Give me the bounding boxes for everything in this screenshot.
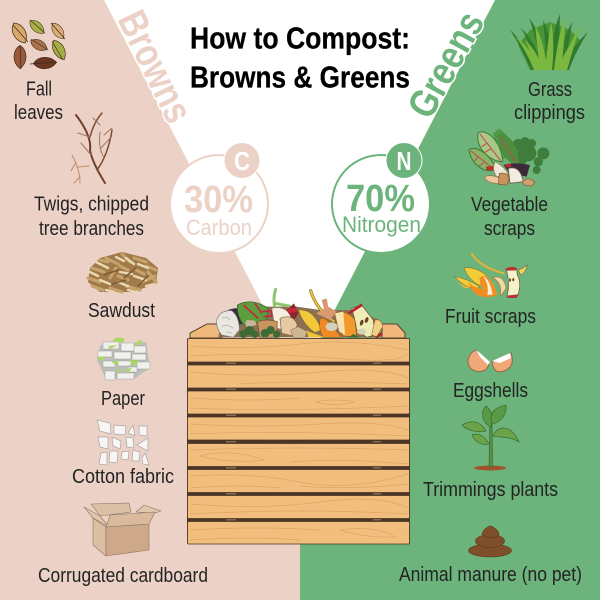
icon: fall leaves xyxy=(9,17,69,69)
label: fall leaves: Fall xyxy=(26,78,52,100)
label: corrugated cardboard: Corrugated cardboard xyxy=(38,565,208,587)
label: grass clippings: clippings xyxy=(514,102,585,124)
label: vegetable scraps xyxy=(471,194,548,240)
badge: 70% nitrogen: 70% xyxy=(346,178,415,220)
icon: cotton fabric xyxy=(97,420,149,465)
label: grass clippings xyxy=(514,79,585,124)
plank gap notches xyxy=(226,362,381,520)
illustration: compost bin xyxy=(187,289,410,544)
badge: 30% carbon: C xyxy=(234,146,250,176)
icon: sawdust xyxy=(88,252,158,292)
heading: Browns: Browns xyxy=(109,4,201,130)
panel: greens background xyxy=(300,0,600,600)
badge: 30% carbon: Carbon xyxy=(186,215,252,240)
label: fruit scraps: Fruit scraps xyxy=(445,306,536,328)
title xyxy=(190,22,410,94)
title: Browns & Greens xyxy=(190,60,410,94)
label: vegetable scraps: Vegetable xyxy=(471,194,548,216)
icon: grass clippings xyxy=(510,14,588,70)
icon: eggshells xyxy=(468,350,512,372)
icon: trimmings plant xyxy=(462,405,519,470)
panel: browns background xyxy=(0,0,300,600)
icon: paper scraps xyxy=(96,337,150,380)
badge: 70% nitrogen: Nitrogen xyxy=(342,212,421,237)
title: How to Compost: xyxy=(190,22,410,56)
label: paper: Paper xyxy=(101,388,145,410)
badge: 30% carbon: 30% xyxy=(184,179,253,221)
label: grass clippings: Grass xyxy=(528,79,572,101)
wood grain xyxy=(190,342,408,540)
label: eggshells: Eggshells xyxy=(453,380,528,402)
label: twigs xyxy=(34,194,149,240)
label: sawdust: Sawdust xyxy=(88,300,155,322)
bin back rim xyxy=(190,324,405,338)
label: twigs: tree branches xyxy=(39,218,144,240)
icon: twigs xyxy=(71,113,112,183)
label: fall leaves: leaves xyxy=(14,102,63,124)
label: fall leaves xyxy=(14,78,63,124)
icon: fruit scraps xyxy=(455,254,527,298)
badge: 70% nitrogen xyxy=(332,142,430,253)
icon: cardboard box xyxy=(84,503,161,556)
wooden planks xyxy=(188,338,410,544)
badge: 30% carbon xyxy=(170,142,268,253)
label: cotton fabric: Cotton fabric xyxy=(72,466,174,488)
badge: 70% nitrogen: N xyxy=(396,146,412,176)
icon: vegetable scraps xyxy=(469,128,549,186)
label: trimmings plants: Trimmings plants xyxy=(423,479,558,501)
label: twigs: Twigs, chipped xyxy=(34,194,149,216)
label: vegetable scraps: scraps xyxy=(484,218,535,240)
icon: animal manure xyxy=(468,526,512,557)
bin shadow gaps xyxy=(187,338,410,544)
compost pile xyxy=(217,289,383,338)
